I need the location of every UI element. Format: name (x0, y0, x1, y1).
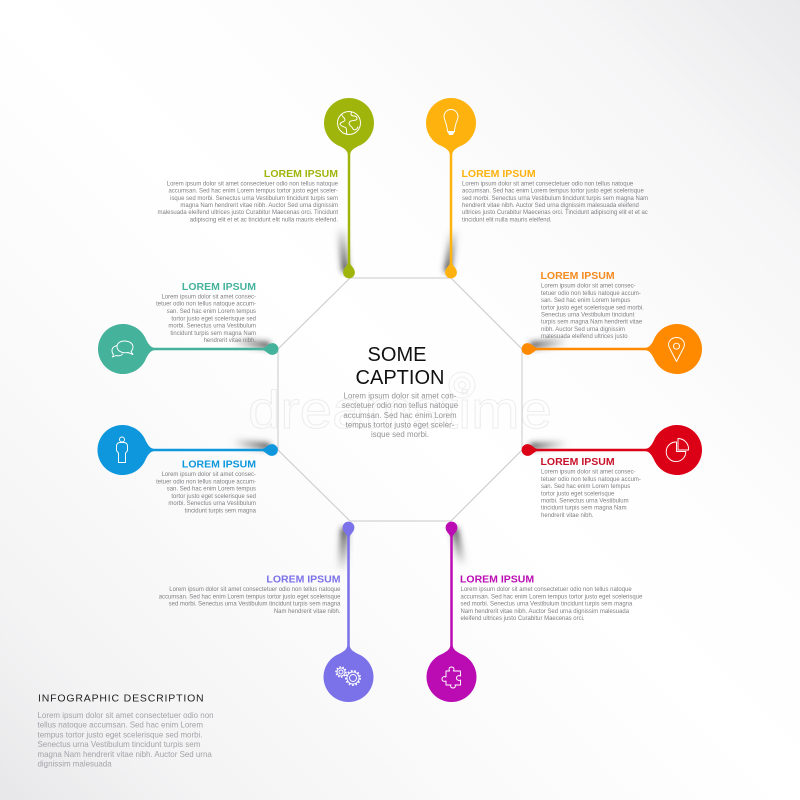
text: yellow: tincidunt elit nulla mauris eleifend. (462, 217, 552, 223)
text: orange: malesuada eleifend ultrices justo (541, 334, 628, 340)
item 3: teal speech pin and text (98, 281, 278, 374)
text: purple: sed morbi. Senectus urna Vestibulum tincidunt turpis sem magna (169, 602, 341, 608)
text: red: san. Sed hac enim Lorem tempus (541, 484, 630, 490)
text: teal: tetuer odio non tellus natoque accum- (156, 302, 256, 308)
center caption heading: SOME (368, 344, 426, 366)
text: magenta: Lorem ipsum dolor sit amet consectetuer odio non tellus natoque (460, 587, 632, 593)
text: purple: Lorem ipsum dolor sit amet consectetuer odio non tellus natoque (169, 587, 341, 593)
text: purple (159, 574, 341, 615)
text: red: tortor justo eget scelerisque (541, 491, 615, 497)
text: orange: tetuer odio non tellus natoque accum- (541, 291, 641, 297)
center caption text: tempus tortor justo eget sceler- (346, 420, 455, 430)
text: blue: tincidunt turpis sem magna (185, 508, 257, 514)
infographic description text: magna Nam hendrerit vitae nibh. Auctor Sed urna (38, 750, 212, 759)
text: yellow: LOREM IPSUM (462, 168, 536, 180)
text: red (540, 456, 641, 519)
item 4: blue person pin and text (97, 425, 278, 514)
pin: blue (97, 425, 278, 475)
infographic description text: dignissim malesuada (38, 760, 112, 768)
text: orange: LOREM IPSUM (540, 270, 615, 282)
text: teal: morbi. Senectus urna Vestibulum (168, 324, 256, 330)
center caption heading (356, 344, 444, 389)
text: green (158, 168, 339, 223)
icon: light bulb (444, 110, 458, 134)
text: yellow: accumsan. Sed hac enim Lorem tempus tortor justo eget scelerisque (462, 189, 644, 195)
watermark: dreamstime (248, 381, 552, 440)
text: orange (540, 270, 644, 340)
text: green: malesuada eleifend ultrices justo Curabitur Maecenas orci. Tincidunt (158, 210, 338, 216)
text: yellow: Lorem ipsum dolor sit amet consectetuer odio non tellus natoque (462, 181, 634, 187)
text: blue: morbi. Senectus urna Vestibulum (168, 501, 256, 507)
pin: green (324, 98, 374, 278)
drop shadows behind pins (232, 226, 568, 572)
text: teal: tortor justo eget scelerisque sed (171, 316, 256, 322)
text: magenta: LOREM IPSUM (460, 574, 534, 586)
text: teal: tincidunt turpis sem magna Nam (170, 331, 256, 337)
infographic description text: Lorem ipsum dolor sit amet consectetuer odio non (38, 711, 214, 720)
pin: teal (98, 324, 278, 374)
text: red: tetuer odio non tellus natoque accum- (541, 477, 641, 483)
center caption heading: CAPTION (356, 367, 444, 389)
text: yellow (462, 168, 648, 223)
text: teal: LOREM IPSUM (182, 281, 256, 293)
text: teal (156, 281, 256, 344)
item 5: orange location pin and text (522, 270, 702, 374)
icon: puzzle piece (442, 667, 460, 688)
text: orange: tortor justo eget scelerisque sed morbi. (541, 305, 644, 311)
text: red: LOREM IPSUM (540, 456, 615, 468)
text: magenta: eleifend ultrices justo Curabitur Maecenas orci. (460, 616, 585, 622)
text: purple: LOREM IPSUM (266, 574, 341, 586)
text: orange: Lorem ipsum dolor sit amet consec- (541, 284, 636, 290)
item 8: magenta puzzle pin and text (426, 522, 643, 702)
text: blue: tortor justo eget scelerisque sed (171, 494, 256, 500)
text: green: Lorem ipsum dolor sit amet consectetuer odio non tellus natoque (167, 181, 339, 187)
center caption text (342, 392, 459, 439)
text: green: accumsan. Sed hac enim Lorem tempus tortor justo eget sceler- (168, 189, 338, 195)
text: magenta: Nam hendrerit vitae nibh. Auctor Sed urna dignissim malesuada (460, 609, 630, 615)
text: red: Lorem ipsum dolor sit amet consec- (541, 470, 636, 476)
infographic description text: Senectus urna Vestibulum tincidunt turpis sem (38, 740, 201, 749)
item 6: red pie chart pin and text (522, 425, 702, 519)
text: magenta: sed morbi. Senectus urna Vestibulum tincidunt turpis sem magna (460, 602, 633, 608)
text: red: morbi. Senectus urna Vestibulum (541, 498, 629, 504)
infographic description text (38, 711, 214, 768)
text: orange: turpis sem magna Nam hendrerit vitae (541, 320, 643, 326)
infographic description text: tempus tortor justo eget scelerisque sed morbi. (38, 730, 203, 739)
item 1: green globe pin and text (158, 98, 374, 278)
pin: orange (522, 324, 702, 374)
central octagon outline (278, 278, 522, 521)
text: orange: san. Sed hac enim Lorem tempus (541, 298, 630, 304)
text: yellow: hendrerit vitae nibh. Auctor Sed urna dignissim malesuada eleifend (462, 203, 639, 209)
pin: purple (324, 522, 374, 702)
infographic description heading: INFOGRAPHIC DESCRIPTION (38, 692, 204, 704)
text: red: tincidunt turpis sem magna Nam (541, 506, 627, 512)
icon: location marker (669, 338, 684, 362)
text: teal: san. Sed hac enim Lorem tempus (167, 309, 256, 315)
text: blue: tetuer odio non tellus natoque accum- (156, 479, 256, 485)
item 2: yellow bulb pin and text (426, 98, 648, 278)
text: teal: Lorem ipsum dolor sit amet consec- (161, 294, 256, 300)
icon: speech bubbles (112, 341, 133, 357)
text: blue: LOREM IPSUM (182, 459, 256, 471)
item 7: purple gears pin and text (159, 522, 374, 702)
text: blue: san. Sed hac enim Lorem tempus (167, 487, 256, 493)
text: yellow: sed morbi. Senectus urna Vestibulum tincidunt turpis sem magna Nam (462, 196, 648, 202)
center caption text: sectetuer odio non tellus natoque (342, 401, 459, 410)
text: purple: Nam hendrerit vitae nibh. (274, 609, 341, 615)
icon: globe (338, 112, 360, 134)
center caption text: accumsan. Sed hac enim Lorem (343, 411, 457, 420)
infographic description text: tellus natoque accumsan. Sed hac enim Lorem (38, 721, 203, 730)
text: green: adipiscing elit et et ac tincidunt elit nulla mauris eleifend. (190, 217, 338, 223)
center caption text: Lorem ipsum dolor sit amet con- (344, 392, 457, 400)
text: yellow: ultrices justo Curabitur Maecenas orci. Tincidunt adipiscing elit et et ac (462, 210, 648, 216)
text: blue (156, 459, 257, 514)
text: magenta (460, 574, 643, 622)
text: green: magna Nam hendrerit vitae nibh. Auctor Sed urna dignissim (180, 203, 338, 209)
text: orange: nibh. Auctor Sed urna dignissim (541, 327, 625, 333)
text: magenta: accumsan. Sed hac enim Lorem tempus tortor justo eget scelerisque (460, 594, 643, 600)
pin: red (522, 425, 702, 475)
text: purple: accumsan. Sed hac enim Lorem tempus tortor justo eget scelerisque (159, 594, 341, 600)
text: red: hendrerit vitae nibh. (541, 513, 594, 519)
pin: yellow (426, 98, 476, 278)
text: orange: Senectus urna Vestibulum tincidunt (541, 312, 635, 318)
pin: magenta (426, 522, 476, 702)
text: teal: hendrerit vitae nibh. (204, 338, 256, 344)
icon: person (116, 437, 128, 462)
text: blue: Lorem ipsum dolor sit amet consec- (161, 472, 256, 478)
icon: gears (336, 667, 360, 685)
text: green: isque sed morbi. Senectus urna Vestibulum tincidunt turpis sem (170, 196, 338, 202)
text: green: LOREM IPSUM (264, 168, 338, 180)
center caption text: isque sed morbi. (371, 430, 429, 439)
icon: pie chart (666, 438, 689, 462)
